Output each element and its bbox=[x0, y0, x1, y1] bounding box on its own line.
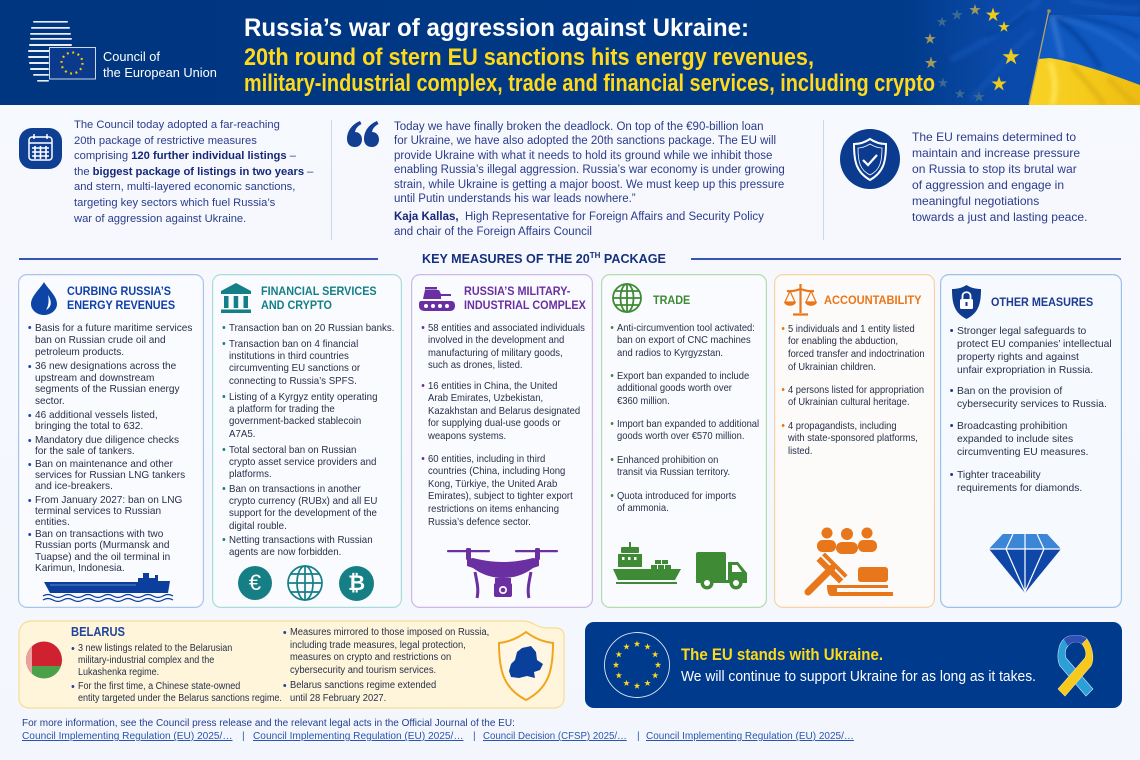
panel: accountability: with state-sponsored platforms, bbox=[788, 432, 918, 444]
heading bbox=[464, 284, 586, 312]
icon: bitcoin coin: ₿ bbox=[348, 572, 365, 595]
heading: INDUSTRIAL COMPLEX bbox=[464, 298, 586, 312]
quote attribution: and chair of the Foreign Affairs Council bbox=[394, 226, 592, 238]
flag artwork bbox=[924, 0, 1140, 105]
heading: TRADE bbox=[653, 293, 690, 307]
icon: bitcoin coin bbox=[339, 566, 374, 601]
panel: other measures: Tighter traceability bbox=[957, 468, 1041, 480]
panel: trade: additional goods worth over bbox=[617, 382, 732, 394]
intro text: targeting key sectors which fuel Russia’s bbox=[74, 197, 275, 209]
heading: ENERGY REVENUES bbox=[67, 298, 175, 312]
bullets bbox=[617, 322, 755, 359]
panel: other measures bbox=[940, 274, 1122, 608]
panel: financial services: A7A5. bbox=[229, 428, 255, 440]
quote text: until Putin understands his war leads nowhere.” bbox=[394, 193, 636, 205]
panel: Belarus bbox=[18, 620, 565, 709]
bullets: for enabling the abduction, bbox=[788, 335, 898, 347]
panel: energy revenues: segments of the Russian energy bbox=[35, 383, 180, 395]
heading: OTHER MEASURES bbox=[991, 295, 1093, 309]
panel: trade: Import ban expanded to additional bbox=[617, 418, 759, 430]
more information text: For more information, see the Council press release and the relevant legal acts in the Official Journal of the EU: bbox=[22, 718, 515, 729]
icon: euro coin bbox=[238, 566, 272, 600]
quote text: provide Ukraine with what it needs to hold its ground while we inhibit those bbox=[394, 150, 772, 162]
banner text: The EU stands with Ukraine. bbox=[681, 645, 883, 664]
panel: trade bbox=[601, 274, 767, 608]
header banner bbox=[0, 0, 1140, 105]
panel: energy revenues: services for Russian LNG tankers bbox=[35, 468, 185, 480]
panel: financial services: platforms. bbox=[229, 468, 272, 480]
intro text: war of aggression against Ukraine. bbox=[74, 213, 246, 225]
bullets: 58 entities and associated individuals bbox=[428, 322, 585, 334]
icon: oil drop bbox=[31, 282, 57, 315]
panel: other measures: requirements for diamonds. bbox=[957, 482, 1082, 494]
heading: RUSSIA’S MILITARY- bbox=[464, 284, 570, 298]
panel: EU stands with Ukraine bbox=[585, 622, 1122, 708]
panel: other measures: expanded to include sites bbox=[957, 432, 1073, 444]
heading: BELARUS bbox=[71, 625, 125, 639]
bullets: forced transfer and indoctrination bbox=[788, 348, 925, 360]
bullets bbox=[788, 322, 925, 374]
quote text: for Ukraine, we have also adopted the 20th sanctions package. The EU will bbox=[394, 135, 776, 147]
right bullets: Measures mirrored to those imposed on Russia, bbox=[290, 627, 489, 638]
closing statement text: meaningful negotiations bbox=[912, 194, 1039, 208]
bullets: manufacturing of military goods, bbox=[428, 347, 563, 359]
icon: tank bbox=[419, 287, 455, 311]
left bullets: military-industrial complex and the bbox=[78, 655, 214, 666]
panel: financial services: Netting transactions with Russian bbox=[229, 534, 373, 546]
panel: financial services: crypto currency (RUBx) and all EU bbox=[229, 495, 377, 507]
legal act links bbox=[22, 731, 854, 742]
panel: financial services: government-backed stablecoin bbox=[229, 415, 361, 427]
heading bbox=[67, 284, 175, 312]
bullets: Transaction ban on 20 Russian banks. bbox=[229, 322, 394, 334]
panel: military-industrial complex bbox=[411, 274, 593, 608]
icon: diamond bbox=[989, 534, 1061, 593]
logo: Council of the European Union bbox=[28, 21, 96, 82]
panel: military-industrial complex: 60 entities, including in third bbox=[428, 453, 545, 465]
bullets: petroleum products. bbox=[35, 346, 124, 358]
panel: energy revenues: entities. bbox=[35, 516, 70, 528]
quote text: enabling Russia’s illegal aggression. Russia’s war economy is under growing bbox=[394, 164, 785, 176]
quote attribution bbox=[394, 211, 764, 238]
bullets: Basis for a future maritime services bbox=[35, 322, 192, 334]
panel: other measures: cybersecurity services to Russia. bbox=[957, 398, 1107, 410]
icon: drone bbox=[447, 548, 558, 598]
heading: FINANCIAL SERVICES bbox=[261, 284, 377, 298]
icon: people and gavel bbox=[804, 528, 893, 596]
heading: ACCOUNTABILITY bbox=[824, 293, 922, 307]
panel: accountability: 4 propagandists, including bbox=[788, 420, 897, 432]
panel: other measures: Ban on the provision of bbox=[957, 384, 1062, 396]
panel: energy revenues: Karimun, Indonesia. bbox=[35, 562, 125, 574]
panel: energy revenues: bringing the total to 632. bbox=[35, 420, 143, 432]
intro text: and stern, multi-layered economic sanctions, bbox=[74, 181, 295, 193]
heading: CURBING RUSSIA’S bbox=[67, 284, 171, 298]
panel: military-industrial complex: restrictions on items enhancing bbox=[428, 503, 559, 515]
intro text: 20th package of restrictive measures bbox=[74, 135, 257, 147]
panel: trade: Enhanced prohibition on bbox=[617, 454, 718, 466]
panel: energy revenues: From January 2027: ban on LNG bbox=[35, 494, 182, 506]
right bullets: cybersecurity and tourism services. bbox=[290, 665, 436, 676]
icon: shield with map of Belarus bbox=[498, 630, 554, 702]
panel: energy revenues: Russian ports (Murmansk and bbox=[35, 539, 169, 551]
panel: accountability: 4 persons listed for appropriation bbox=[788, 384, 924, 396]
closing statement text: maintain and increase pressure bbox=[912, 146, 1080, 160]
bullets bbox=[35, 322, 192, 358]
closing statement text: The EU remains determined to bbox=[912, 130, 1076, 144]
panel: military-industrial complex: for supplying dual-use goods or bbox=[428, 417, 561, 429]
bullets: and radios to Kyrgyzstan. bbox=[617, 347, 723, 359]
panel: other measures: circumventing EU measures. bbox=[957, 446, 1089, 458]
panel: energy revenues: terminal services to Russian bbox=[35, 504, 161, 516]
bullets: ban on Russian crude oil and bbox=[35, 334, 166, 346]
heading bbox=[261, 284, 377, 312]
panel: military-industrial complex: Kazakhstan and Belarus designated bbox=[428, 405, 580, 417]
panel: financial services: crypto asset service providers and bbox=[229, 456, 376, 468]
panel: energy revenues: and ice-breakers. bbox=[35, 480, 113, 492]
panel: financial services: digital rouble. bbox=[229, 520, 287, 532]
panel: financial services: a platform for trading the bbox=[229, 403, 335, 415]
closing statement text: towards a just and lasting peace. bbox=[912, 210, 1087, 224]
bullets: protect EU companies’ intellectual bbox=[957, 338, 1112, 350]
title bbox=[244, 14, 935, 97]
panel: financial services: institutions in third countries bbox=[229, 350, 349, 362]
panel: military-industrial complex: Arab Emirates, Uzbekistan, bbox=[428, 392, 543, 404]
closing statement text bbox=[912, 130, 1087, 224]
panel: accountability: listed. bbox=[788, 445, 812, 457]
panel: Belarus: until 28 February 2027. bbox=[290, 692, 386, 704]
icon: quotation mark bbox=[347, 121, 379, 147]
intro text bbox=[74, 119, 314, 225]
panel: energy revenues: for the sale of tankers. bbox=[35, 444, 135, 456]
logo text bbox=[103, 49, 217, 80]
panel: trade: €360 million. bbox=[617, 395, 670, 407]
bullets: unfair expropriation in Russia. bbox=[957, 364, 1093, 376]
right bullets: including trade measures, legal protection, bbox=[290, 640, 466, 651]
panel: energy revenues bbox=[18, 274, 204, 608]
panel: energy revenues: sector. bbox=[35, 395, 65, 407]
quote attribution: Kaja Kallas, High Representative for Foreign Affairs and Security Policy bbox=[394, 211, 764, 223]
bullets: ban on export of CNC machines bbox=[617, 334, 751, 346]
panel: Belarus: entity targeted under the Belarus sanctions regime. bbox=[78, 693, 282, 704]
bullets: of Ukrainian children. bbox=[788, 361, 876, 373]
legal act links: Council Implementing Regulation (EU) 2025/… bbox=[646, 731, 854, 742]
title: 20th round of stern EU sanctions hits energy revenues, bbox=[244, 44, 814, 71]
title: Russia’s war of aggression against Ukraine: bbox=[244, 14, 749, 42]
panel: financial services: circumventing EU sanctions or bbox=[229, 362, 360, 374]
icon: bank bbox=[221, 283, 251, 313]
legal act links: | bbox=[637, 731, 640, 742]
panel: military-industrial complex: Kong, Türkiye, the United Arab bbox=[428, 478, 557, 490]
panel: financial services: Ban on transactions in another bbox=[229, 483, 361, 495]
panel: financial services: Listing of a Kyrgyz entity operating bbox=[229, 391, 377, 403]
panel: energy revenues: 36 new designations across the bbox=[35, 360, 176, 372]
panel: energy revenues: 46 additional vessels listed, bbox=[35, 408, 158, 420]
icon: globe bbox=[287, 565, 323, 601]
legal act links: Council Implementing Regulation (EU) 2025/… bbox=[253, 731, 463, 742]
intro text: The Council today adopted a far-reaching bbox=[74, 119, 280, 131]
icon: cargo ship bbox=[613, 542, 681, 584]
bullets: 5 individuals and 1 entity listed bbox=[788, 322, 915, 334]
icon: globe bbox=[612, 283, 642, 313]
right bullets bbox=[290, 627, 489, 678]
quote text: Today we have finally broken the deadlock. On top of the €90-billion loan bbox=[394, 121, 764, 133]
bullets: Stronger legal safeguards to bbox=[957, 324, 1086, 336]
panel: military-industrial complex: Russia’s defence sector. bbox=[428, 516, 531, 528]
panel: accountability bbox=[774, 274, 935, 608]
icon: scales bbox=[784, 284, 817, 316]
heading: AND CRYPTO bbox=[261, 298, 332, 312]
left bullets bbox=[78, 643, 232, 679]
panel: financial services bbox=[212, 274, 402, 608]
panel: trade: Quota introduced for imports bbox=[617, 490, 736, 502]
icon: shield lock bbox=[952, 285, 981, 319]
icon: tanker ship bbox=[42, 573, 174, 602]
panel: trade: Export ban expanded to include bbox=[617, 370, 749, 382]
legal act links: Council Implementing Regulation (EU) 2025/… bbox=[22, 731, 232, 742]
icon: truck bbox=[696, 552, 747, 590]
panel: financial services: agents are now forbidden. bbox=[229, 546, 341, 558]
icon: calendar bbox=[19, 128, 62, 169]
intro text: comprising 120 further individual listings – bbox=[74, 150, 296, 162]
right bullets: measures on crypto and restrictions on bbox=[290, 652, 451, 663]
panel: energy revenues: Mandatory due diligence checks bbox=[35, 434, 179, 446]
panel: Belarus: Belarus sanctions regime extended bbox=[290, 680, 436, 691]
panel: energy revenues: Ban on maintenance and other bbox=[35, 458, 173, 470]
bullets: property rights and against bbox=[957, 350, 1079, 362]
closing statement text: of aggression and engage in bbox=[912, 178, 1064, 192]
panel: other measures: Broadcasting prohibition bbox=[957, 420, 1067, 432]
legal act links: | bbox=[242, 731, 245, 742]
panel: energy revenues: upstream and downstream bbox=[35, 372, 154, 384]
intro text: the biggest package of listings in two years – bbox=[74, 166, 313, 178]
panel background bbox=[18, 620, 565, 709]
bullets: Anti-circumvention tool activated: bbox=[617, 322, 755, 334]
panel: Belarus: For the first time, a Chinese state-owned bbox=[78, 681, 240, 692]
panel: accountability: of Ukrainian cultural heritage. bbox=[788, 396, 910, 408]
legal act links: | bbox=[473, 731, 476, 742]
legal act links: Council Decision (CFSP) 2025/… bbox=[483, 731, 627, 742]
panel: trade: of ammonia. bbox=[617, 502, 669, 514]
bullets bbox=[957, 324, 1112, 376]
panel: military-industrial complex: 16 entities in China, the United bbox=[428, 380, 557, 392]
quote text bbox=[394, 121, 785, 238]
icon: shield check bbox=[840, 129, 900, 189]
quote text: strain, while Ukraine is getting a major boost. We must keep up this pressure bbox=[394, 179, 784, 191]
left bullets: 3 new listings related to the Belarusian bbox=[78, 643, 232, 654]
panel: military-industrial complex: weapons systems. bbox=[428, 430, 506, 442]
panel: financial services: connecting to Russia’s SPFS. bbox=[229, 375, 357, 387]
icon: Belarus flag bbox=[26, 642, 62, 678]
section heading: KEY MEASURES OF THE 20TH PACKAGE bbox=[422, 251, 666, 266]
bullets bbox=[428, 322, 585, 372]
bullets: such as drones, listed. bbox=[428, 359, 523, 371]
panel: financial services: Transaction ban on 4 financial bbox=[229, 338, 358, 350]
bullets: involved in the development and bbox=[428, 334, 564, 346]
closing statement text: on Russia to stop its brutal war bbox=[912, 162, 1077, 176]
icon: EU stars circle bbox=[604, 632, 670, 698]
logo text: Council of bbox=[103, 49, 160, 64]
title: military-industrial complex, trade and financial services, including crypto bbox=[244, 70, 935, 97]
panel: trade: transit via Russian territory. bbox=[617, 466, 730, 478]
icon: ribbon bbox=[1058, 635, 1094, 696]
logo text: the European Union bbox=[103, 65, 217, 80]
panel: energy revenues: Tuapse) and the oil terminal in bbox=[35, 551, 170, 563]
left bullets: Lukashenka regime. bbox=[78, 667, 159, 678]
panel: energy revenues: Ban on transactions with two bbox=[35, 528, 163, 540]
icon: euro coin: € bbox=[249, 570, 261, 595]
panel: military-industrial complex: countries (China, including Hong bbox=[428, 465, 565, 477]
banner text bbox=[681, 645, 1036, 685]
panel: trade: goods worth over €570 million. bbox=[617, 430, 744, 442]
banner text: We will continue to support Ukraine for as long as it takes. bbox=[681, 668, 1036, 685]
panel: military-industrial complex: Emirates), subject to tighter export bbox=[428, 490, 573, 502]
panel: financial services: support for the development of the bbox=[229, 507, 377, 519]
panel: financial services: Total sectoral ban on Russian bbox=[229, 444, 356, 456]
